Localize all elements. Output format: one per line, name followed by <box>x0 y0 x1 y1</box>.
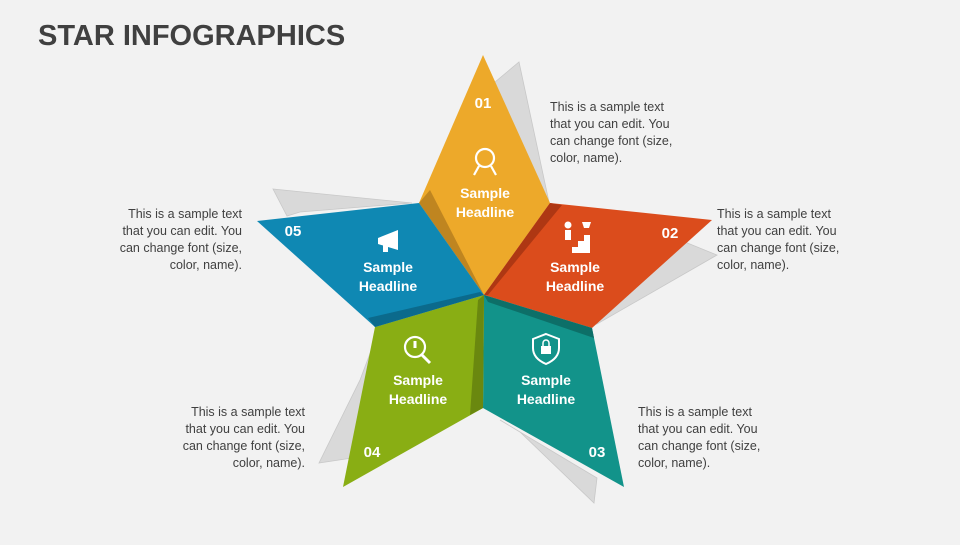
text 04: can change font (size, <box>183 439 305 453</box>
number 04: 04 <box>364 444 381 461</box>
text 04: that you can edit. You <box>185 422 305 436</box>
number 01: 01 <box>475 95 491 112</box>
text 02: can change font (size, <box>717 241 839 255</box>
number 02: 02 <box>662 225 678 242</box>
text 05: can change font (size, <box>120 241 242 255</box>
petal 02 <box>484 203 712 328</box>
text 01 <box>550 100 672 165</box>
text 05: that you can edit. You <box>122 224 242 238</box>
text 02: This is a sample text <box>717 207 831 221</box>
text 05: color, name). <box>170 258 242 272</box>
icon: megaphone <box>378 230 398 252</box>
text 03: that you can edit. You <box>638 422 758 436</box>
text 02: color, name). <box>717 258 789 272</box>
headline 01: Sample <box>460 185 510 201</box>
petal 04: Headline <box>389 391 447 407</box>
text 03: color, name). <box>638 456 710 470</box>
text 03 <box>638 405 760 470</box>
shadows <box>273 62 717 503</box>
text 05 <box>120 207 243 272</box>
text 03: can change font (size, <box>638 439 760 453</box>
text 04 <box>183 405 306 470</box>
icon: magnifier <box>405 337 430 363</box>
petal 03: Headline <box>517 391 575 407</box>
petal 03 <box>483 295 624 487</box>
petal 05 <box>257 203 484 327</box>
number 03: 03 <box>589 444 605 461</box>
petal 01 <box>419 55 550 295</box>
text 02: that you can edit. You <box>717 224 837 238</box>
text 01: color, name). <box>550 151 622 165</box>
text 01: can change font (size, <box>550 134 672 148</box>
title: STAR INFOGRAPHICS <box>38 20 345 52</box>
icon: shield lock <box>533 334 559 364</box>
headline 02: Sample <box>550 259 600 275</box>
icon: stairs <box>560 222 591 253</box>
text 03: This is a sample text <box>638 405 752 419</box>
text 01: This is a sample text <box>550 100 664 114</box>
headline 05: Sample <box>363 259 413 275</box>
text 05: This is a sample text <box>128 207 243 221</box>
headline 04: Sample <box>393 372 443 388</box>
text 04: This is a sample text <box>191 405 306 419</box>
headline 03: Sample <box>521 372 571 388</box>
petal 05: Headline <box>359 278 417 294</box>
petal 04 <box>343 295 484 487</box>
text 04: color, name). <box>233 456 305 470</box>
petal 02: Headline <box>546 278 604 294</box>
icon: award <box>474 149 496 175</box>
petal 01: Headline <box>456 204 514 220</box>
text 02 <box>717 207 839 272</box>
text 01: that you can edit. You <box>550 117 670 131</box>
number 05: 05 <box>285 223 301 240</box>
